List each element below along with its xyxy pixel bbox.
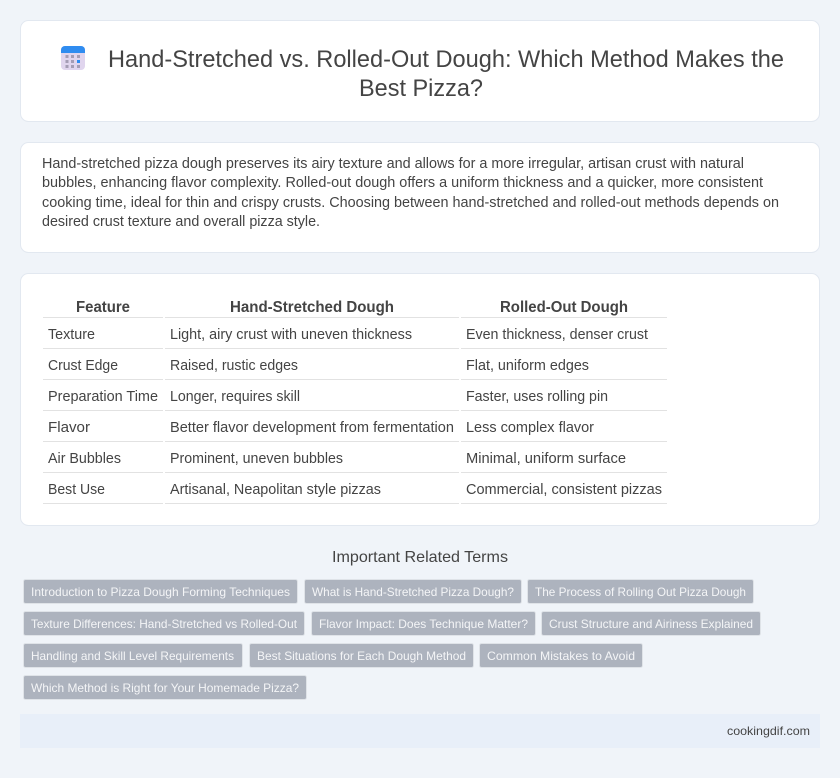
text block: description: desired crust texture and overall pizza style. (42, 214, 320, 230)
table rows: Raised, rustic edges (170, 358, 298, 374)
related term tags: Best Situations for Each Dough Method (257, 649, 466, 663)
title (108, 46, 784, 102)
table rows: Texture (48, 327, 95, 343)
related term tags: Texture Differences: Hand-Stretched vs Rolled-Out (31, 617, 298, 631)
table rows: Commercial, consistent pizzas (466, 482, 662, 498)
table rows: Artisanal, Neapolitan style pizzas (170, 482, 381, 498)
table rows: Best Use (48, 482, 105, 498)
table rows: Preparation Time (48, 389, 158, 405)
table rows: Crust Edge (48, 358, 118, 374)
text block: description (42, 156, 779, 230)
panel: comparison table (20, 274, 820, 526)
panel: description (20, 142, 820, 252)
related term tags: The Process of Rolling Out Pizza Dough (535, 585, 746, 599)
related term tags: Crust Structure and Airiness Explained (549, 617, 753, 631)
table header: Feature (76, 299, 130, 316)
table rows: Light, airy crust with uneven thickness (170, 327, 412, 343)
related term tags: What is Hand-Stretched Pizza Dough? (312, 585, 514, 599)
related term tags: Handling and Skill Level Requirements (31, 649, 234, 663)
table rows: Less complex flavor (466, 420, 594, 436)
table rows: Flat, uniform edges (466, 358, 589, 374)
footer: cookingdif.com (727, 724, 810, 738)
text block: description: bubbles, enhancing flavor complexity. Rolled-out dough offers a uniform thickness and a quicker, more consistent (42, 175, 763, 191)
text block: description: Hand-stretched pizza dough preserves its airy texture and allows for a more irregular, artisan crust with natural (42, 156, 744, 172)
table rows: Prominent, uneven bubbles (170, 451, 343, 467)
table rows: Faster, uses rolling pin (466, 389, 608, 405)
related term tags: Which Method is Right for Your Homemade Pizza? (31, 681, 299, 695)
table rows: Air Bubbles (48, 451, 121, 467)
related term tags (24, 580, 760, 700)
table rows: Flavor (48, 420, 90, 436)
table rows: Longer, requires skill (170, 389, 300, 405)
related term tags: Flavor Impact: Does Technique Matter? (319, 617, 528, 631)
title: Hand-Stretched vs. Rolled-Out Dough: Which Method Makes the (108, 46, 784, 73)
heading: important related terms: Important Related Terms (332, 549, 508, 566)
table header: Rolled-Out Dough (500, 299, 628, 316)
title: Best Pizza? (359, 75, 483, 102)
icon: calendar (61, 46, 85, 70)
table rows: Even thickness, denser crust (466, 327, 648, 343)
table rows: Minimal, uniform surface (466, 451, 626, 467)
related term tags: Common Mistakes to Avoid (487, 649, 635, 663)
table header: Hand-Stretched Dough (230, 299, 394, 316)
table rows (48, 327, 662, 498)
footer (20, 714, 820, 748)
text block: description: cooking time, ideal for thin and crispy crusts. Choosing between hand-stretched and rolled-out methods depends on (42, 195, 779, 211)
related term tags: Introduction to Pizza Dough Forming Techniques (31, 585, 290, 599)
table rows: Better flavor development from fermentation (170, 420, 454, 436)
table header (76, 299, 628, 316)
panel: header (20, 20, 820, 122)
